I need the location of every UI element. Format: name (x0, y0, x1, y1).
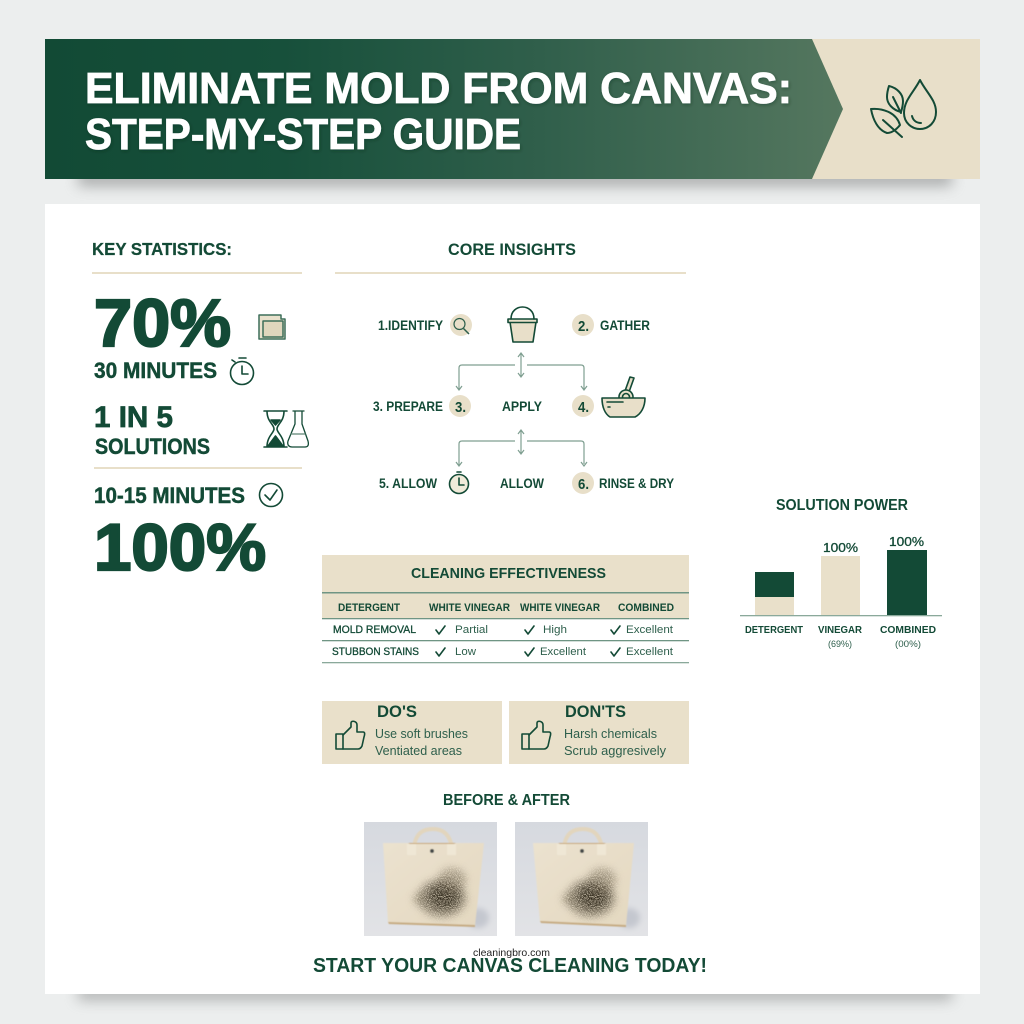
banner shadow (78, 170, 952, 186)
table header: WHITE VINEGAR (429, 602, 510, 614)
row: stubborn stains (332, 646, 673, 658)
axis labels: DETERGENT (745, 624, 804, 636)
heading: don'ts: DON'TS (565, 702, 626, 721)
row: mold removal: Excellent (626, 624, 673, 636)
icon: clock (450, 472, 468, 494)
title: ELIMINATE MOLD FROM CANVAS: (85, 64, 792, 113)
table header: COMBINED (618, 602, 674, 614)
do's list: Ventiated areas (375, 744, 462, 758)
allow label: ALLOW (500, 476, 544, 491)
step 2 label: GATHER (600, 318, 650, 333)
icon: thumbs up (522, 721, 551, 749)
heading: before & after: BEFORE & AFTER (443, 792, 570, 809)
title (85, 64, 792, 159)
table header (338, 602, 674, 614)
stat: 30 minutes: 30 MINUTES (94, 358, 217, 383)
axis sublabels (828, 639, 921, 649)
row: mold removal: High (543, 624, 567, 636)
title: STEP-MY-STEP GUIDE (85, 110, 521, 159)
icon: bowl (602, 377, 645, 417)
apply label: APPLY (502, 399, 542, 414)
step 3 badge: 3. (455, 399, 466, 416)
do's list: Use soft brushes (375, 727, 468, 741)
don'ts list: Scrub aggresively (564, 744, 667, 758)
step 6 label: RINSE & DRY (599, 476, 674, 491)
table title: CLEANING EFFECTIVENESS (411, 565, 606, 582)
icon: bucket (508, 307, 537, 342)
panel: cleaning effectiveness table (322, 555, 689, 663)
axis labels (745, 624, 936, 636)
do's list (375, 727, 468, 758)
axis labels: COMBINED (880, 624, 936, 636)
bar: detergent (755, 572, 794, 615)
step 1: 1.IDENTIFY (378, 318, 443, 333)
panel: core insights (335, 240, 686, 494)
row: mold removal (333, 624, 673, 636)
icon: hourglass (264, 411, 287, 447)
heading: do's: DO'S (377, 702, 417, 721)
row: stubborn stains: Low (455, 646, 476, 658)
row: mold removal: Partial (455, 624, 488, 636)
stat: solutions: SOLUTIONS (95, 434, 210, 459)
panel: solution power chart (740, 497, 942, 649)
arrows: first branch (456, 353, 587, 390)
step 4 badge (572, 395, 594, 417)
panel: do's (322, 701, 502, 764)
stat: 1 in 5: 1 IN 5 (94, 401, 173, 434)
step 2: 2. (578, 318, 589, 335)
value labels (823, 534, 924, 555)
photo: after (515, 822, 648, 936)
value labels: 100% (823, 540, 858, 555)
step 3 badge (449, 395, 471, 417)
bar: vinegar (821, 556, 860, 615)
axis labels: VINEGAR (818, 624, 862, 636)
don'ts list: Harsh chemicals (564, 727, 657, 741)
icon: thumbs up (336, 721, 365, 749)
icon: folder (259, 315, 285, 339)
row: stubborn stains: STUBBON STAINS (332, 646, 419, 658)
icon: flask (288, 411, 308, 447)
value labels: 100% (889, 534, 924, 549)
axis sublabels: (00%) (895, 639, 921, 649)
source credit: cleaningbro.com (473, 947, 550, 959)
step 3: 3. PREPARE (373, 399, 443, 414)
step 5: 5. ALLOW (379, 476, 437, 491)
stat: 10-15 minutes: 10-15 MINUTES (94, 483, 245, 508)
step 6 badge: 6. (578, 476, 589, 493)
photo: before (364, 822, 497, 936)
chart title: SOLUTION POWER (776, 497, 908, 514)
arrows: second branch (456, 430, 587, 466)
heading: key statistics: KEY STATISTICS: (92, 239, 232, 259)
table header: DETERGENT (338, 602, 400, 614)
icon: stopwatch (230, 358, 254, 384)
icon: magnifier (450, 314, 472, 336)
bar: combined (887, 550, 927, 615)
don'ts list (564, 727, 667, 758)
panel: don'ts (509, 701, 689, 764)
step 6 badge (572, 472, 594, 494)
step 4 badge: 4. (578, 399, 589, 416)
row: stubborn stains: Excellent (540, 646, 586, 658)
row: mold removal: MOLD REMOVAL (333, 624, 416, 636)
axis sublabels: (69%) (828, 639, 852, 649)
panel: before and after (364, 792, 648, 936)
stat: 70%: 70% (94, 286, 231, 361)
row: stubborn stains: Excellent (626, 646, 673, 658)
icon: check circle (260, 484, 282, 506)
panel: key statistics (92, 239, 308, 584)
heading: core insights: CORE INSIGHTS (448, 240, 576, 259)
banner (45, 39, 980, 179)
table header: WHITE VINEGAR (520, 602, 600, 614)
icon: leaves and water drop (871, 80, 936, 137)
step 2 (572, 314, 594, 336)
card shadow (78, 986, 952, 1000)
main card (45, 204, 980, 994)
call to action: START YOUR CANVAS CLEANING TODAY! (313, 954, 707, 977)
stat: 100%: 100% (94, 510, 266, 584)
